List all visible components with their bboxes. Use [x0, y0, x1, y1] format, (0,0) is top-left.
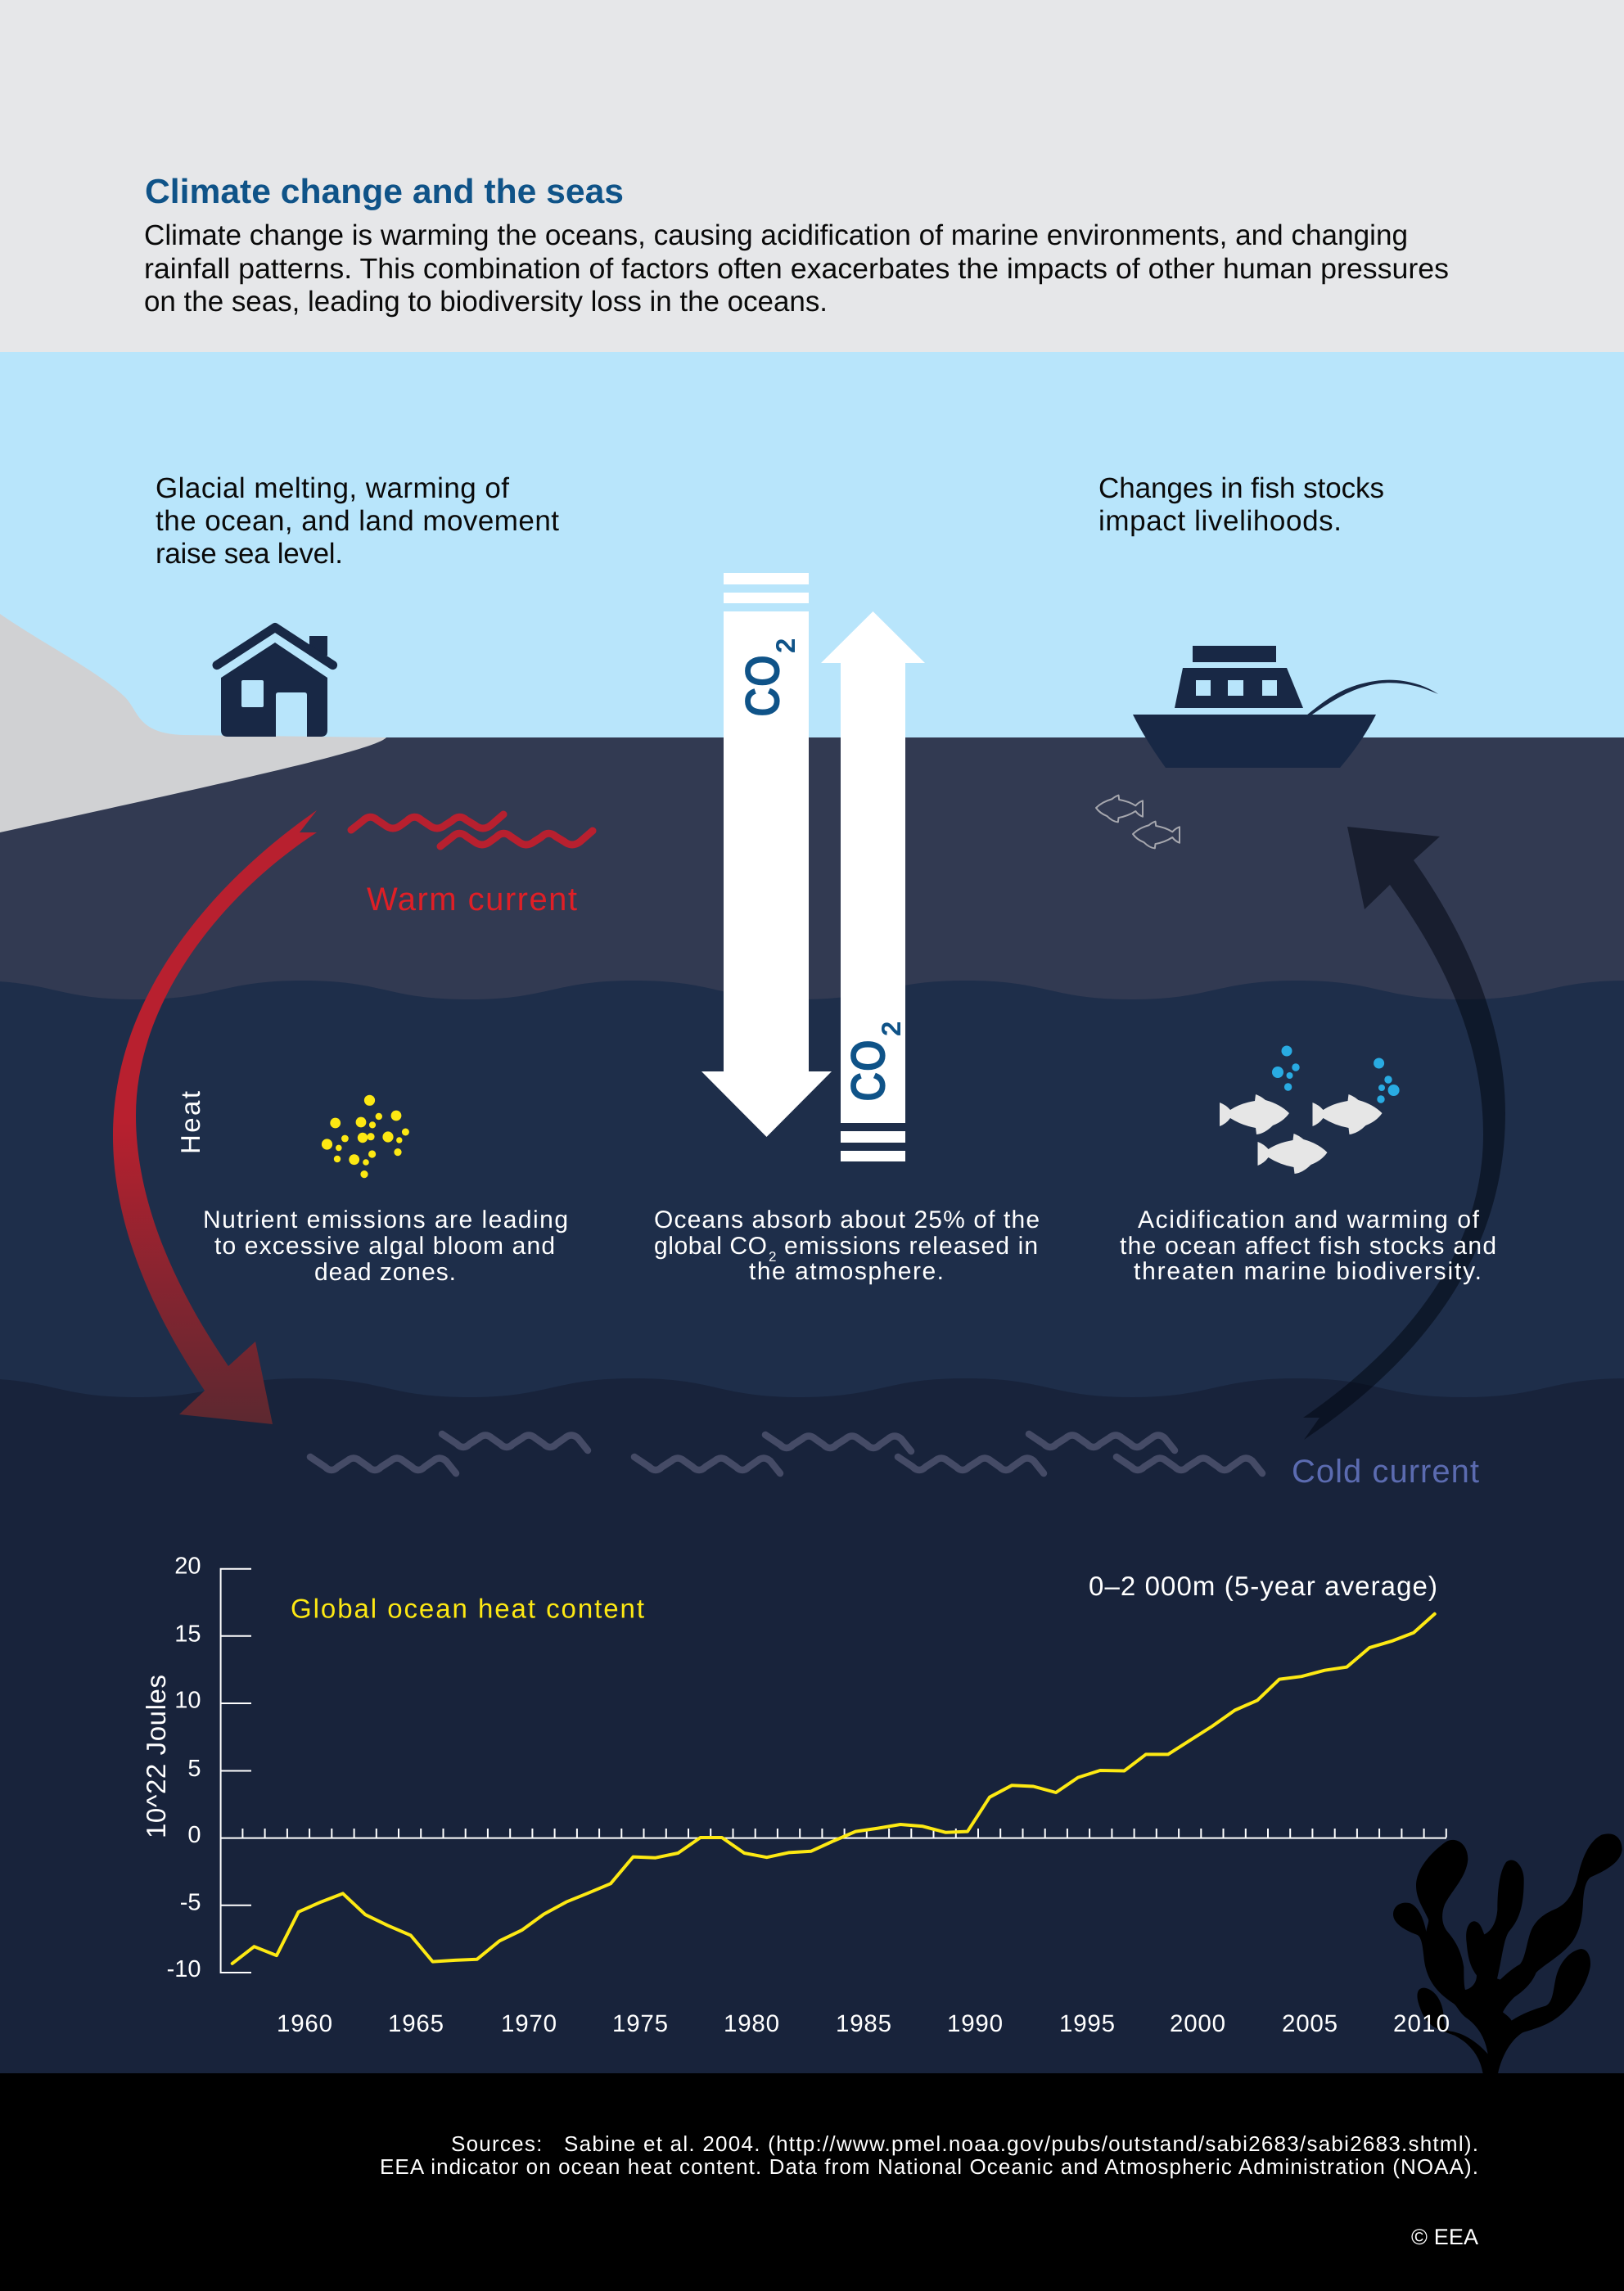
warm current label: Warm current: [367, 882, 577, 918]
icon: fish and bubbles: [1220, 1046, 1400, 1174]
warm current arrow: [113, 810, 317, 1424]
sea surface layer: [0, 737, 1624, 1032]
y axis labels: -10: [167, 1956, 201, 1982]
y axis title: 10^22 Joules: [141, 1675, 171, 1838]
icon: seaweed: [1393, 1833, 1622, 2073]
x axis labels: 1990: [947, 2010, 1003, 2037]
y axis labels: 10: [174, 1688, 201, 1714]
CO2 down arrow: 2: [770, 638, 801, 653]
cold current label: Cold current: [1292, 1454, 1479, 1490]
CO2 down arrow: CO: [735, 655, 790, 717]
sea level text: the ocean, and land movement: [156, 505, 559, 537]
land: [0, 614, 386, 832]
header band: [0, 0, 1624, 352]
sea level text: Glacial melting, warming of: [156, 472, 509, 504]
x axis labels: 2000: [1170, 2010, 1225, 2037]
y axis labels: 5: [187, 1756, 201, 1782]
icon: outline fish: [1096, 796, 1180, 848]
CO2 up arrow: [821, 611, 925, 1161]
cold current arrow: [1303, 827, 1505, 1440]
intro text: on the seas, leading to biodiversity loss in the oceans.: [144, 286, 828, 318]
y axis labels: 15: [174, 1621, 201, 1648]
y axis labels: [167, 1553, 201, 1982]
chart title: Global ocean heat content: [291, 1593, 644, 1624]
copyright: © EEA: [1411, 2225, 1478, 2249]
acidification text: threaten marine biodiversity.: [1134, 1258, 1482, 1285]
nutrient text: dead zones.: [314, 1259, 456, 1286]
x axis labels: 1970: [501, 2010, 557, 2037]
fish stocks text: [1098, 472, 1384, 537]
intro text: Climate change is warming the oceans, causing acidification of marine environments, and changing: [144, 219, 1408, 251]
intro text: [144, 219, 1449, 318]
chart series label: 0–2 000m (5-year average): [1089, 1571, 1437, 1601]
nutrient text: to excessive algal bloom and: [214, 1233, 555, 1260]
CO2 absorption text: 2: [769, 1249, 776, 1265]
icon: algal bloom dots: [322, 1095, 409, 1178]
x axis labels: 2005: [1282, 2010, 1338, 2037]
x axis labels: 1975: [612, 2010, 668, 2037]
icon: fishing boat: [1133, 646, 1438, 768]
icon: house: [217, 627, 333, 737]
heat content line: [232, 1614, 1435, 1964]
sky: [0, 352, 1624, 737]
chart: global ocean heat content: [141, 1553, 1450, 2037]
x axis labels: 1960: [277, 2010, 332, 2037]
chart axes and ticks: [221, 1569, 1446, 1973]
sea middle layer: [0, 981, 1624, 1473]
heat label: Heat: [175, 1091, 205, 1154]
x axis labels: 1995: [1059, 2010, 1115, 2037]
acidification text: Acidification and warming of: [1138, 1206, 1480, 1233]
fish stocks text: impact livelihoods.: [1098, 505, 1342, 537]
CO2 absorption text: [654, 1206, 1040, 1285]
nutrient text: [203, 1206, 568, 1286]
sea level text: [156, 472, 559, 570]
CO2 absorption text: the atmosphere.: [749, 1258, 944, 1285]
CO2 absorption text: global CO: [654, 1233, 767, 1260]
x axis labels: 1980: [724, 2010, 779, 2037]
x axis labels: 1965: [388, 2010, 444, 2037]
title: Climate change and the seas: [145, 172, 624, 210]
sea level text: raise sea level.: [156, 538, 343, 570]
CO2 up arrow: CO: [841, 1040, 895, 1102]
fish stocks text: Changes in fish stocks: [1098, 472, 1384, 504]
sea deep layer: [0, 1378, 1624, 2073]
acidification text: the ocean affect fish stocks and: [1120, 1233, 1496, 1260]
CO2 down arrow: [701, 573, 832, 1137]
CO2 absorption text: Oceans absorb about 25% of the: [654, 1206, 1040, 1233]
acidification text: [1120, 1206, 1496, 1285]
CO2 up arrow: 2: [876, 1021, 906, 1036]
y axis labels: -5: [180, 1889, 201, 1915]
CO2 absorption text: emissions released in: [784, 1233, 1038, 1260]
nutrient text: Nutrient emissions are leading: [203, 1206, 568, 1233]
y axis labels: 20: [174, 1553, 201, 1579]
warm current waves: [351, 814, 593, 846]
x axis labels: [277, 2010, 1450, 2037]
sources: Sources: Sabine et al. 2004. (http://www.pmel.noaa.gov/pubs/outstand/sabi2683/sabi2683.shtml).: [451, 2131, 1478, 2156]
intro text: rainfall patterns. This combination of factors often exacerbates the impacts of other human pressures: [144, 253, 1449, 285]
footer band: [0, 2073, 1624, 2291]
y axis labels: 0: [187, 1822, 201, 1848]
sources: [380, 2131, 1478, 2179]
sources: EEA indicator on ocean heat content. Data from National Oceanic and Atmospheric Administration (NOAA).: [380, 2154, 1478, 2179]
x axis labels: 2010: [1393, 2010, 1450, 2037]
cold current waves: [310, 1434, 1262, 1473]
x axis labels: 1985: [836, 2010, 891, 2037]
